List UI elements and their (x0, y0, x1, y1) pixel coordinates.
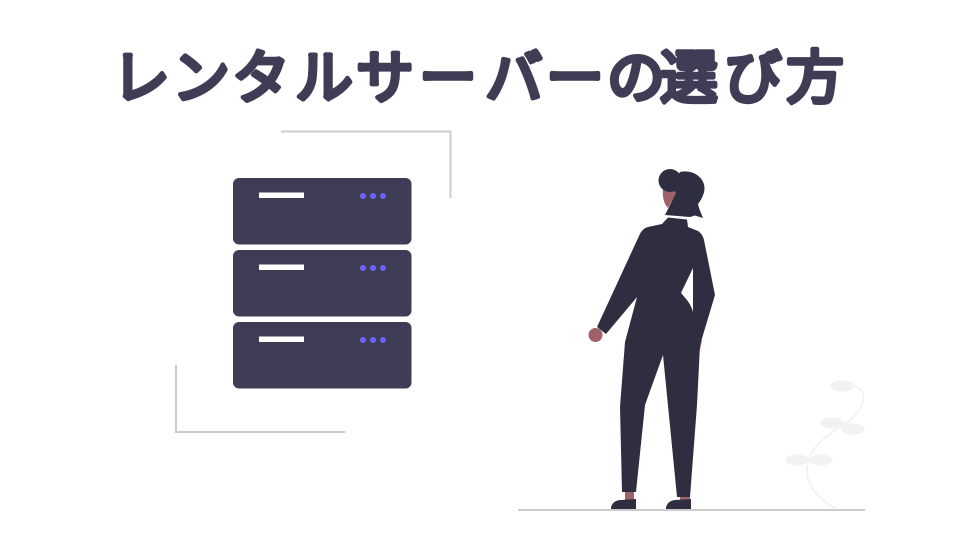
hair (658, 169, 705, 218)
icon: server stack (233, 178, 412, 388)
server unit 3 (233, 322, 412, 388)
bracket: top right (281, 132, 450, 198)
title: レンタルサーバーの選び方 (112, 46, 844, 111)
shoe: left (611, 499, 636, 509)
server unit 2 (233, 250, 412, 316)
server unit 1 (233, 178, 412, 244)
shoe: right (666, 499, 691, 509)
skin: face, hand, ankles (588, 188, 702, 500)
plant (786, 380, 864, 508)
person (588, 169, 715, 509)
bracket: bottom left (176, 365, 345, 432)
ground line (518, 509, 865, 511)
suit and trousers (597, 218, 715, 497)
